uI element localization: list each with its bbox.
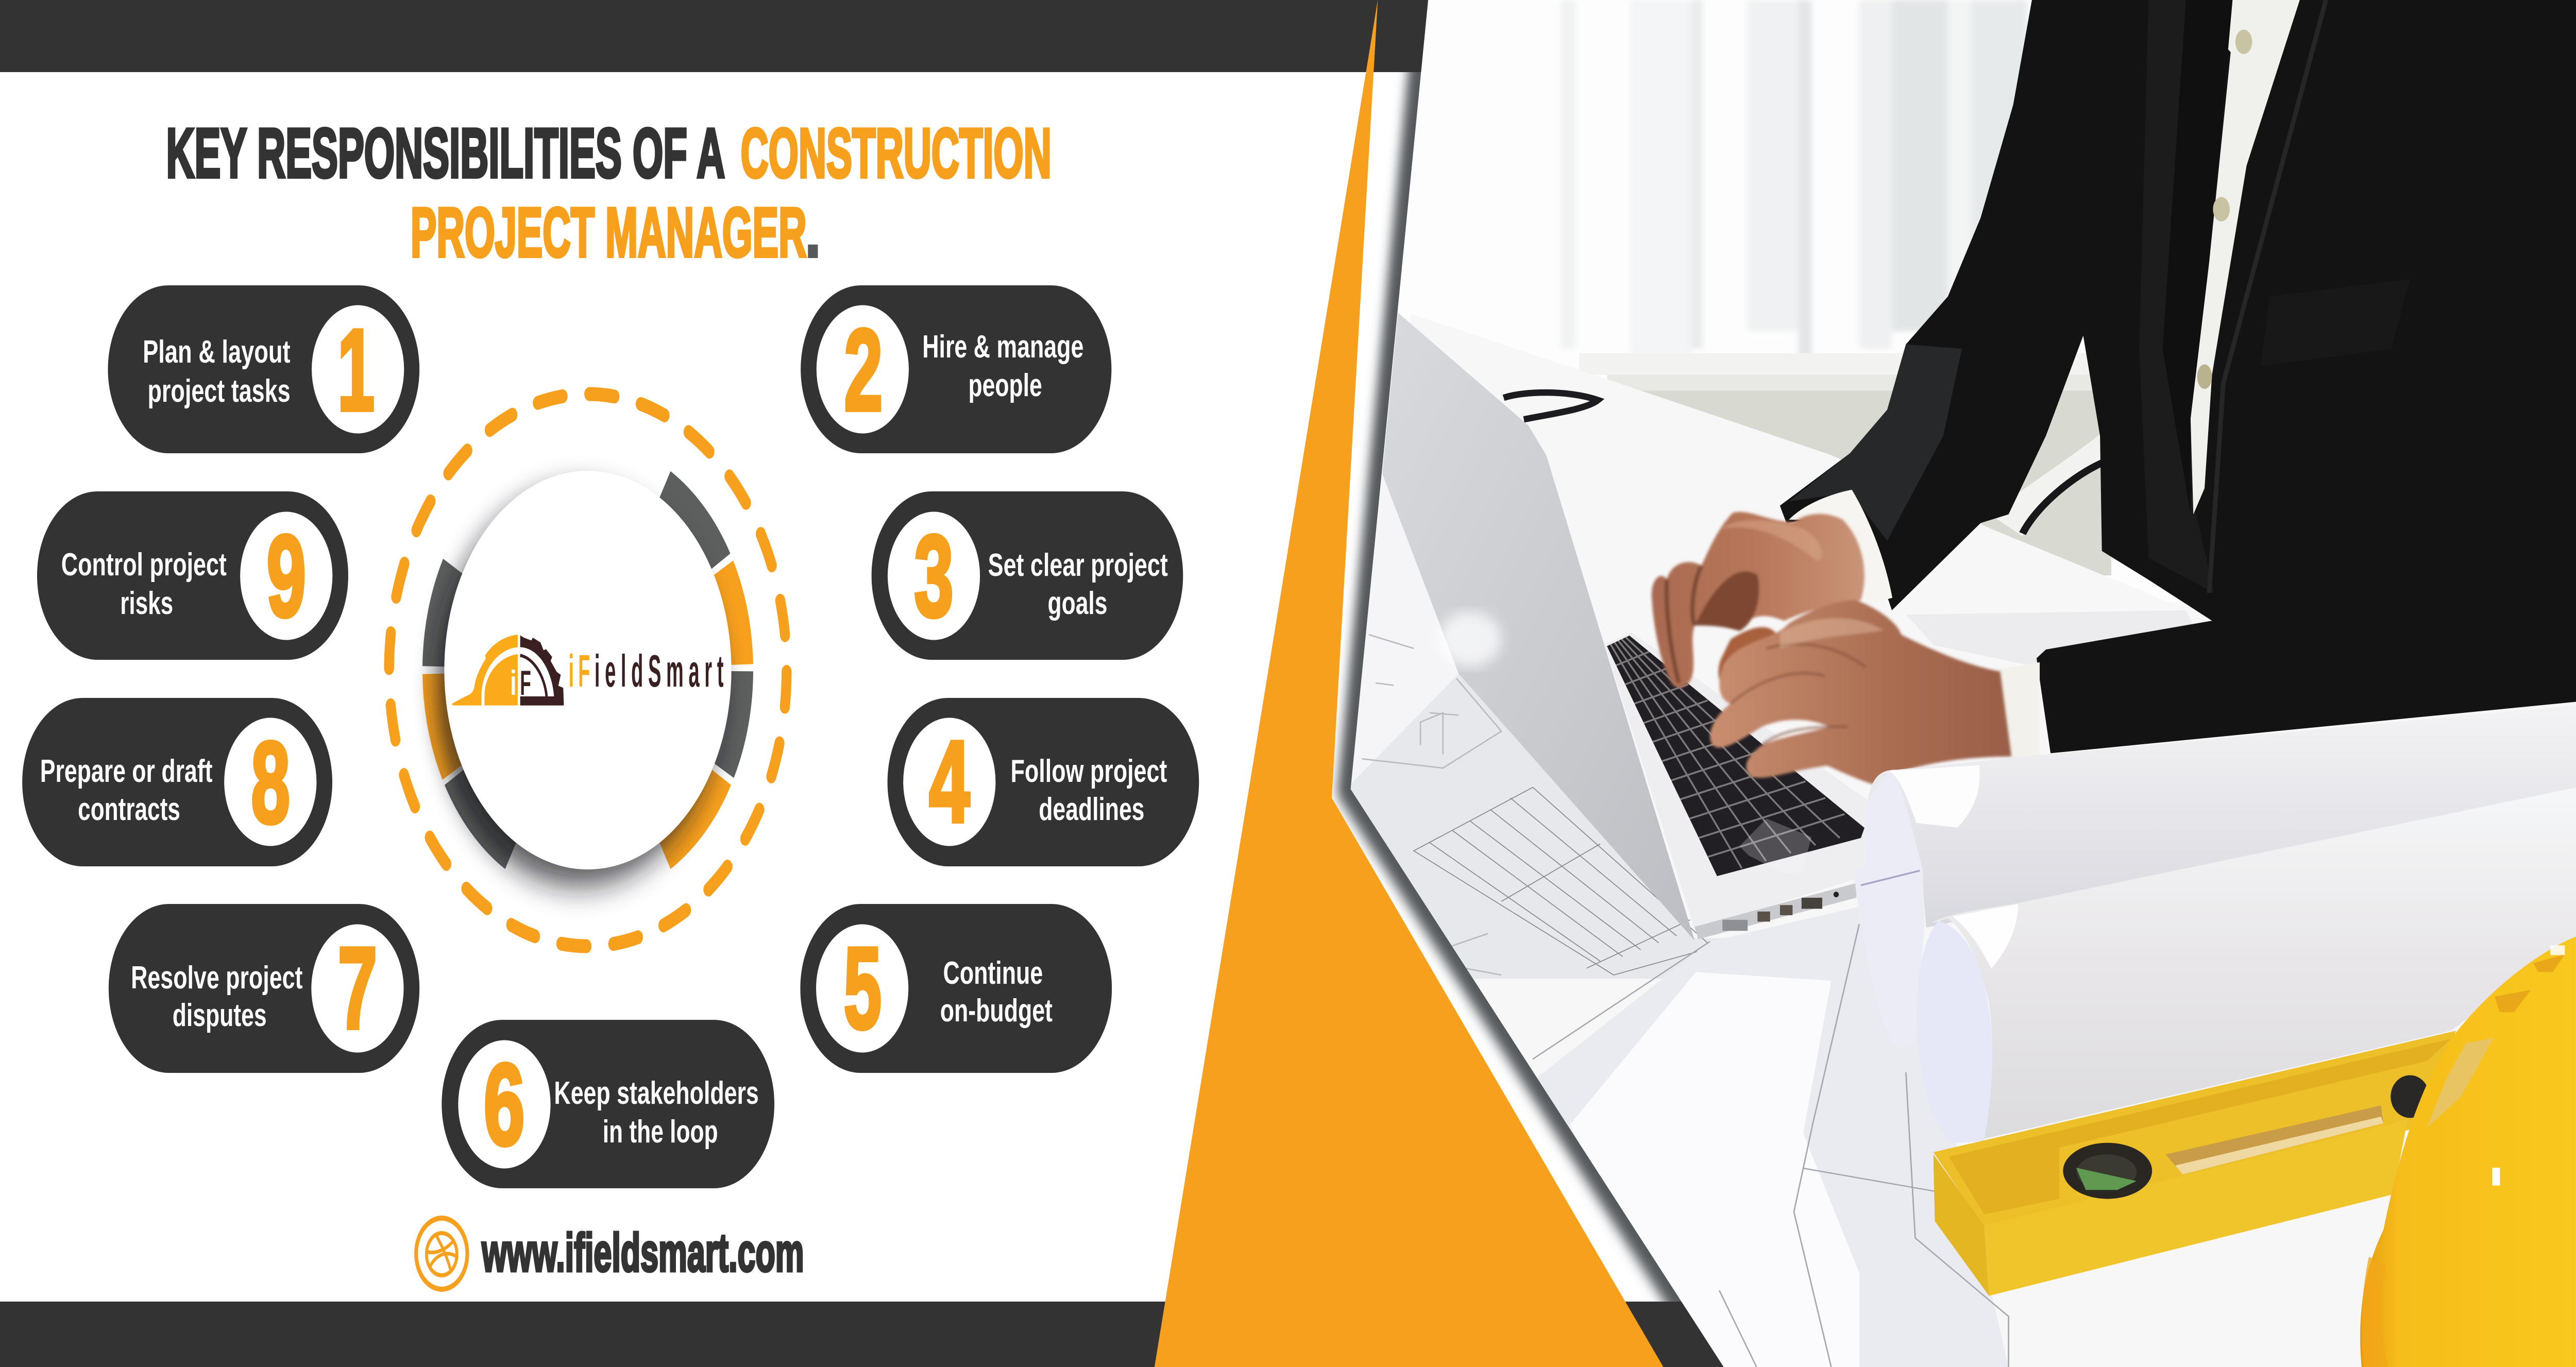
label 6: in the loop — [603, 1114, 718, 1150]
lower hand — [1710, 600, 2011, 784]
photo background: window blinds and wall — [1561, 0, 2111, 575]
upper hand — [1652, 512, 1865, 688]
thumb of upper hand — [1718, 627, 1780, 690]
roll one end cap — [1854, 772, 1925, 1048]
logo emblem letters: i — [510, 663, 517, 703]
label 1: Plan & layout — [143, 334, 291, 370]
disc shadow — [436, 489, 722, 886]
pill 3: set goals — [872, 491, 1183, 660]
pill 9: control risks — [37, 491, 348, 660]
pill 6: keep stakeholders — [442, 1020, 774, 1188]
dashed orange ring — [389, 394, 787, 946]
label 3: goals — [1048, 586, 1107, 621]
number 8: 8 — [251, 718, 290, 847]
iFieldSmart logo — [452, 635, 723, 706]
white disc — [444, 471, 732, 869]
label 4: Follow project — [1011, 754, 1167, 789]
logo emblem letters: F — [520, 663, 531, 703]
logo wordmark: iF — [569, 646, 590, 696]
white shadowed strip beside photo — [1332, 0, 1723, 1367]
label 4 — [1011, 754, 1167, 827]
label 6: Keep stakeholders — [554, 1075, 759, 1111]
level vial — [2063, 1143, 2152, 1199]
label 9: Control project — [61, 547, 227, 583]
photo: yellow spirit level — [1934, 1031, 2456, 1296]
label 7 — [131, 960, 302, 1033]
number 1: 1 — [337, 305, 375, 435]
number 2: 2 — [844, 305, 883, 435]
title: CONSTRUCTION — [741, 114, 1052, 193]
number 4: 4 — [929, 717, 970, 846]
title: KEY RESPONSIBILITIES OF A — [166, 114, 725, 193]
photo: laptop — [1382, 313, 1874, 941]
logo emblem — [452, 635, 564, 706]
roll two end cap — [1917, 921, 1992, 1143]
label 8: Prepare or draft — [40, 754, 212, 789]
segmented inner ring — [433, 484, 742, 856]
photo: manager typing at laptop with blueprints and hard hat — [1298, 0, 2576, 1367]
number 5: 5 — [844, 924, 882, 1053]
laptop lid — [1382, 313, 1694, 941]
photo: lower blueprint sheet and sunlit patch — [1533, 907, 2009, 1367]
label 5 — [940, 955, 1053, 1029]
number 7: 7 — [338, 924, 377, 1053]
label 1: project tasks — [147, 373, 291, 409]
icon: dribbble globe — [416, 1218, 467, 1289]
label 3: Set clear project — [988, 548, 1168, 583]
logo wordmark: ieldSmart — [595, 646, 723, 696]
label 5: on-budget — [940, 993, 1053, 1029]
laptop deck — [1605, 633, 1874, 929]
label 4: deadlines — [1039, 792, 1144, 827]
photo: desk surface — [1352, 379, 2193, 1367]
top dark bar — [0, 0, 1428, 72]
laptop front edge and ports — [1694, 883, 1856, 939]
photo: blueprint paper with drawings — [1351, 389, 1724, 979]
title — [166, 114, 1052, 272]
label 7: Resolve project — [131, 960, 302, 996]
black strap on desk — [1504, 392, 1598, 419]
label 8 — [40, 754, 212, 827]
label 8: contracts — [78, 792, 180, 827]
number 9: 9 — [267, 511, 306, 641]
bottom dark bar — [0, 1302, 1724, 1367]
label 2 — [922, 329, 1083, 403]
photo: shirt cuffs — [1789, 490, 2040, 758]
website footer — [416, 1218, 804, 1289]
photo: blueprint rolls — [1854, 705, 2576, 1143]
label 7: disputes — [173, 998, 267, 1033]
pill 8: prepare contracts — [22, 698, 332, 866]
number 3: 3 — [914, 511, 954, 641]
title: . — [805, 194, 820, 272]
photo: yellow hard hat — [2360, 936, 2576, 1367]
pill 2: hire and manage — [801, 285, 1111, 453]
logo emblem letters — [510, 663, 531, 703]
roll one — [1868, 705, 2576, 928]
pill 7: resolve disputes — [109, 904, 419, 1073]
roll two — [1931, 788, 2576, 1139]
label 2: people — [968, 368, 1042, 403]
label 9 — [61, 547, 227, 621]
pill 4: follow deadlines — [888, 698, 1199, 866]
photo: typing hands — [1652, 512, 2011, 784]
central diagram — [389, 394, 787, 946]
orange diagonal shape — [1155, 0, 1663, 1367]
label 3 — [988, 548, 1168, 621]
title: PROJECT MANAGER — [411, 194, 807, 272]
website url: www.ifieldsmart.com — [481, 1223, 804, 1283]
label 1 — [143, 334, 291, 409]
number 6: 6 — [484, 1040, 525, 1169]
photo: suit, shirt and tie — [1780, 0, 2576, 753]
label 6 — [554, 1075, 759, 1150]
pill 1: plan and layout — [108, 285, 419, 453]
pill 5: continue on budget — [800, 904, 1112, 1073]
label 5: Continue — [943, 955, 1043, 991]
label 9: risks — [120, 586, 173, 621]
label 2: Hire & manage — [922, 329, 1083, 365]
laptop keyboard — [1607, 636, 1865, 876]
